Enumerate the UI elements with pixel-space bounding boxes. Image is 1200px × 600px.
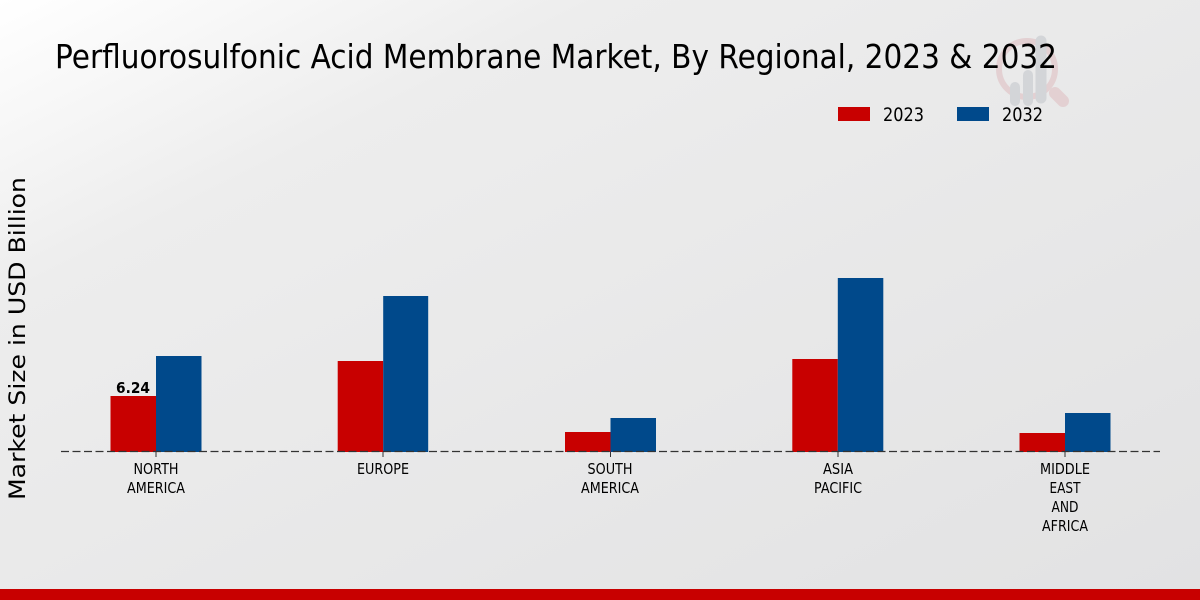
- bar chart: [110, 278, 1110, 452]
- category label: north america: [127, 460, 186, 497]
- legend item: 2023: [838, 105, 924, 126]
- x axis baseline: [61, 450, 1160, 452]
- value label: 6.24: 6.24: [116, 379, 150, 397]
- middle east and africa bars: [1020, 413, 1110, 452]
- category label: asia pacific: [814, 460, 862, 497]
- north america bars: [110, 356, 202, 452]
- category label: middle east and africa: AND: [1052, 498, 1078, 516]
- legend: [838, 105, 1043, 126]
- legend item: 2032: [957, 105, 1043, 126]
- category label: north america: AMERICA: [127, 479, 186, 497]
- title: Perfluorosulfonic Acid Membrane Market, By Regional, 2023 & 2032: [55, 37, 1057, 76]
- category label: middle east and africa: EAST: [1050, 479, 1081, 497]
- y axis label: Market Size in USD Billion: [5, 177, 31, 500]
- category label: asia pacific: ASIA: [823, 460, 854, 478]
- south america bars: [565, 418, 656, 452]
- footer bar: [0, 589, 1200, 600]
- category label: europe: EUROPE: [357, 460, 409, 478]
- category label: south america: AMERICA: [581, 479, 640, 497]
- category label: middle east and africa: MIDDLE: [1040, 460, 1090, 478]
- icon: watermark magnifier logo: [999, 41, 1063, 101]
- legend item: 2032: 2032: [1002, 105, 1043, 126]
- category label: middle east and africa: AFRICA: [1042, 517, 1089, 535]
- category label: asia pacific: PACIFIC: [814, 479, 862, 497]
- category label: north america: NORTH: [134, 460, 178, 478]
- asia pacific bars: [792, 278, 883, 452]
- europe bars: [338, 296, 428, 452]
- category label: middle east and africa: [1040, 460, 1090, 535]
- category label: south america: SOUTH: [588, 460, 632, 478]
- legend item: 2023: 2023: [883, 105, 924, 126]
- category label: south america: [581, 460, 640, 497]
